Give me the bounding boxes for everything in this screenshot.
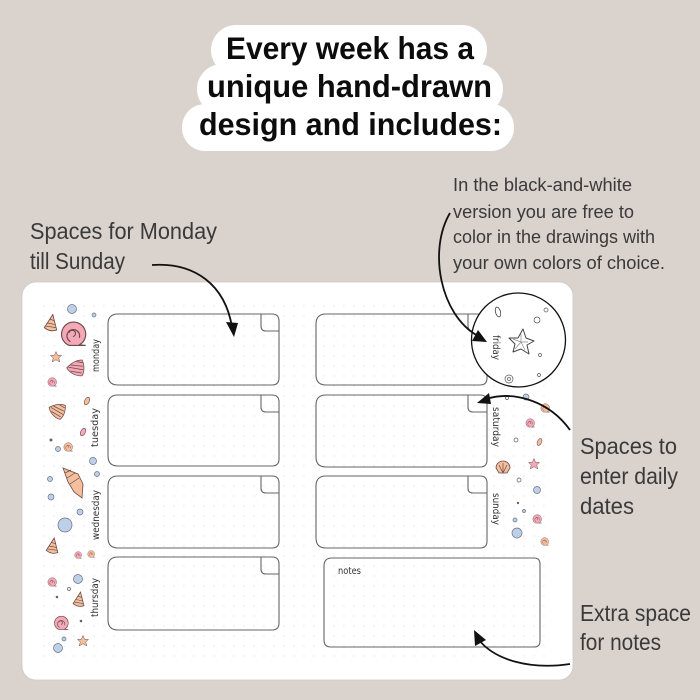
callout: black-and-white version: version you are free to: [453, 201, 634, 222]
tuesday block: [90, 395, 279, 466]
arrow: to Saturday date tab: [477, 393, 570, 430]
callout: spaces for Monday till Sunday: Spaces for Monday: [30, 218, 217, 244]
left column sea shell drawings: [44, 304, 100, 652]
title banner: design and includes:: [199, 106, 502, 142]
saturday block: saturday: [490, 407, 501, 447]
friday label: friday: [490, 335, 501, 360]
wednesday block: [91, 476, 279, 548]
callout: black-and-white version: color in the drawings with: [453, 226, 655, 247]
monday block: [91, 314, 279, 385]
callout: spaces to enter daily dates: dates: [580, 493, 634, 519]
arrow: to Monday block: [152, 265, 238, 337]
callout: black-and-white version: your own colors of choice.: [453, 252, 665, 273]
callout: spaces to enter daily dates: Spaces to: [580, 433, 677, 459]
callout: extra space for notes: Extra space: [580, 600, 691, 626]
thursday block: thursday: [90, 578, 101, 617]
arrow: to notes block: [474, 630, 570, 666]
uncoloured starfish drawing: [494, 307, 548, 383]
friday block: [316, 314, 487, 385]
sunday block: [316, 476, 501, 548]
wednesday block: wednesday: [91, 490, 102, 540]
right column sea shell drawings: [496, 394, 550, 545]
magnified black-and-white circle: [472, 293, 566, 387]
title banner: Every week has a: [226, 30, 474, 66]
callout: spaces to enter daily dates: enter daily: [580, 463, 678, 489]
callout: spaces to enter daily dates: [580, 433, 678, 519]
planner page panel: [22, 282, 573, 680]
saturday block: [316, 395, 501, 467]
sunday block: sunday: [490, 493, 501, 525]
callout: spaces for Monday till Sunday: till Sunday: [30, 248, 125, 274]
tuesday block: tuesday: [90, 408, 101, 447]
callout: extra space for notes: for notes: [580, 629, 661, 655]
notes block: notes: [338, 566, 361, 577]
thursday block: [90, 557, 279, 630]
callout: spaces for Monday till Sunday: [30, 218, 217, 274]
callout: black-and-white version: In the black-and-white: [453, 174, 632, 195]
callout: extra space for notes: [580, 600, 691, 655]
title banner: [182, 25, 514, 151]
callout: black-and-white version: [453, 174, 665, 273]
notes block: [324, 558, 540, 647]
monday block: monday: [91, 339, 102, 372]
title banner: unique hand-drawn: [207, 68, 492, 104]
arrow: to magnified friday: [439, 213, 487, 342]
